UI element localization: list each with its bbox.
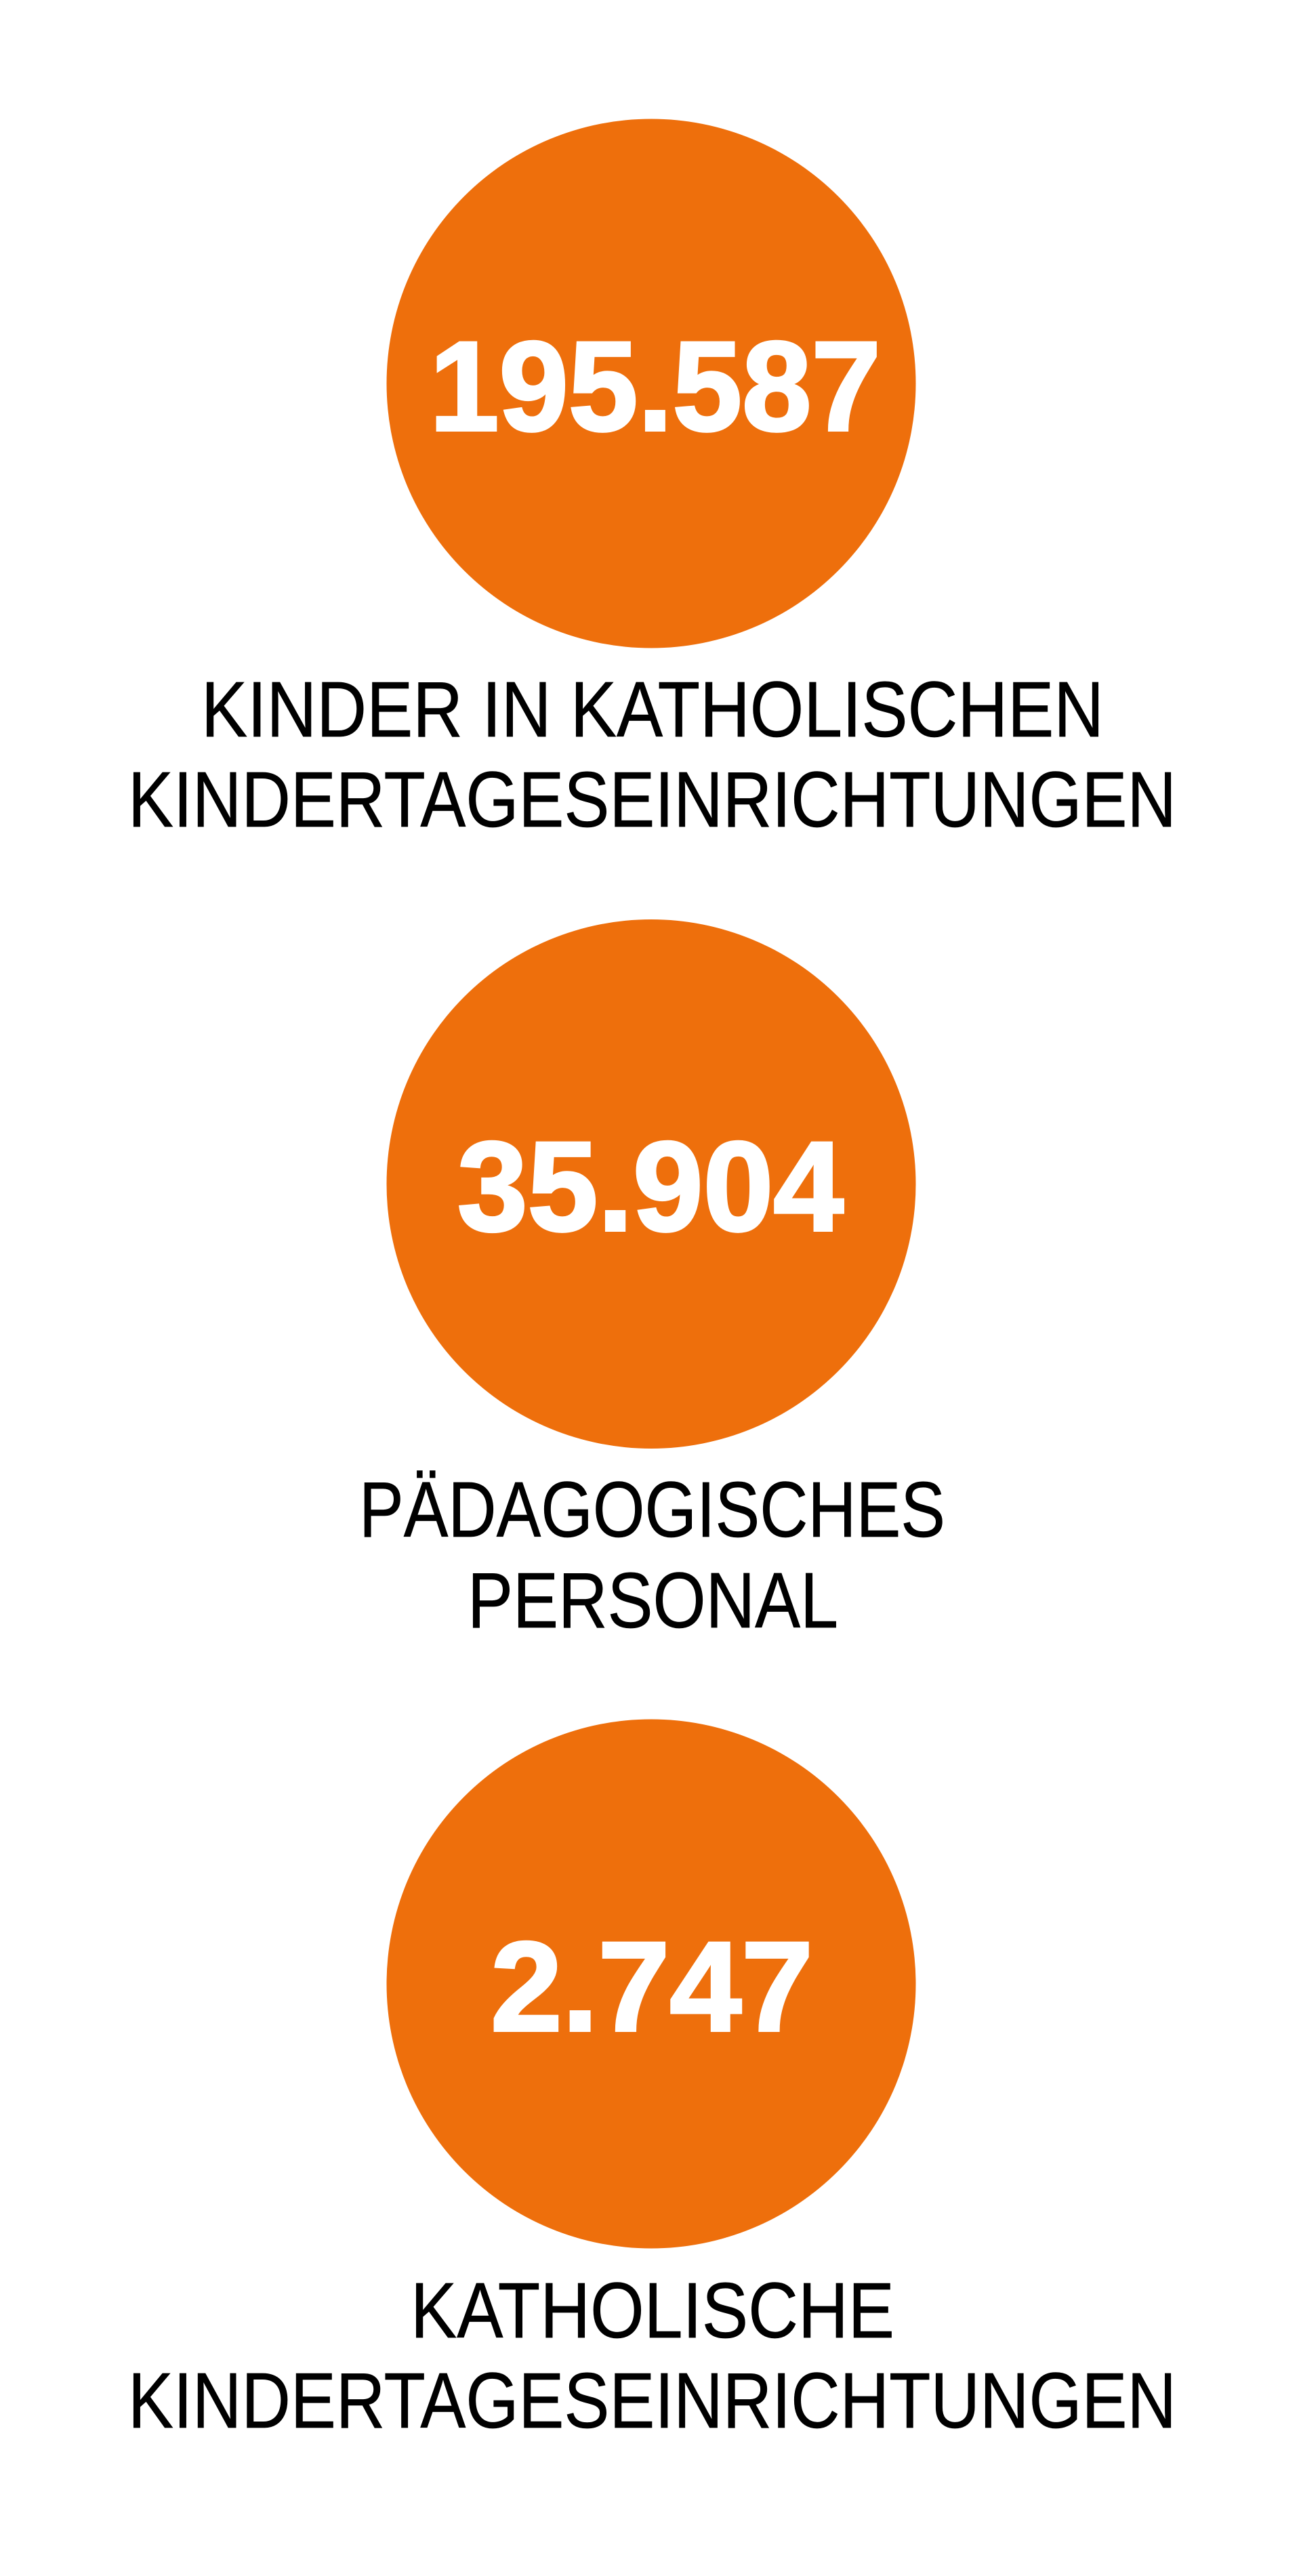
- number: 195.587: 195.587: [430, 315, 881, 457]
- label: pedagogical staff: PERSONAL: [468, 1556, 838, 1644]
- panel: facilities statistic: [128, 1720, 1176, 2445]
- label: pedagogical staff: [359, 1466, 945, 1644]
- label: Catholic daycare facilities: [128, 2266, 1176, 2445]
- number: 2.747: 2.747: [491, 1915, 813, 2058]
- panel: staff statistic: [359, 919, 945, 1644]
- label: Catholic daycare facilities: KATHOLISCHE: [411, 2266, 894, 2354]
- label: children in Catholic daycare: KINDER IN KATHOLISCHEN: [201, 665, 1104, 753]
- label: pedagogical staff: PÄDAGOGISCHES: [359, 1466, 945, 1554]
- circle: staff: [386, 919, 916, 1449]
- number: 35.904: 35.904: [457, 1115, 844, 1258]
- panel: children statistic: [128, 119, 1176, 844]
- circle: children: [386, 119, 916, 648]
- circle: facilities: [386, 1720, 916, 2248]
- label: children in Catholic daycare: [128, 665, 1176, 844]
